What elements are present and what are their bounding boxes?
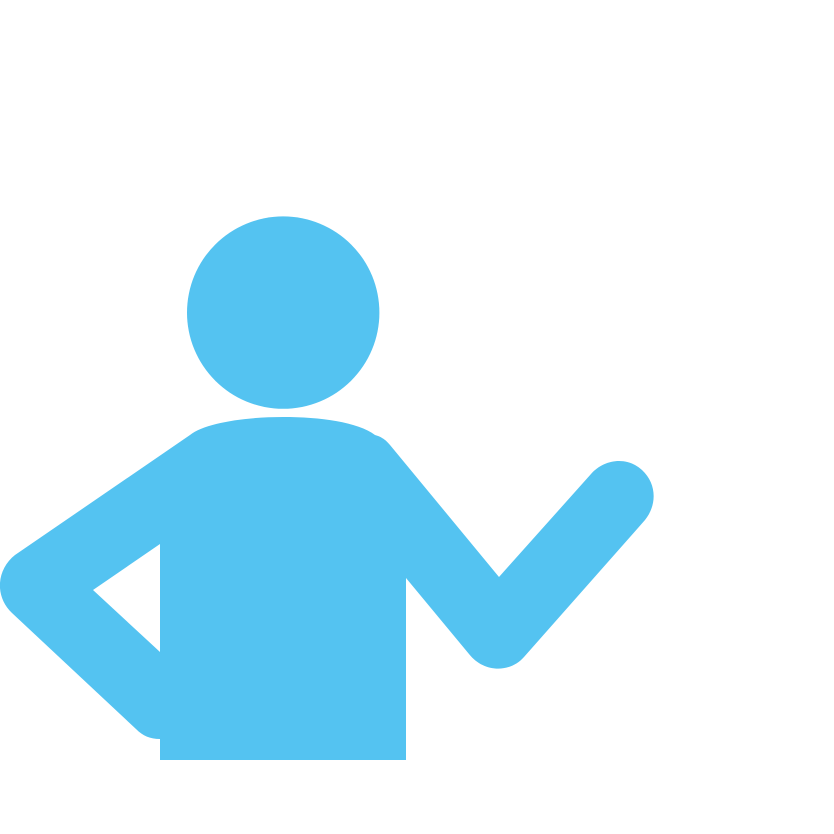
- head: [187, 216, 379, 409]
- body with arms: [0, 417, 654, 760]
